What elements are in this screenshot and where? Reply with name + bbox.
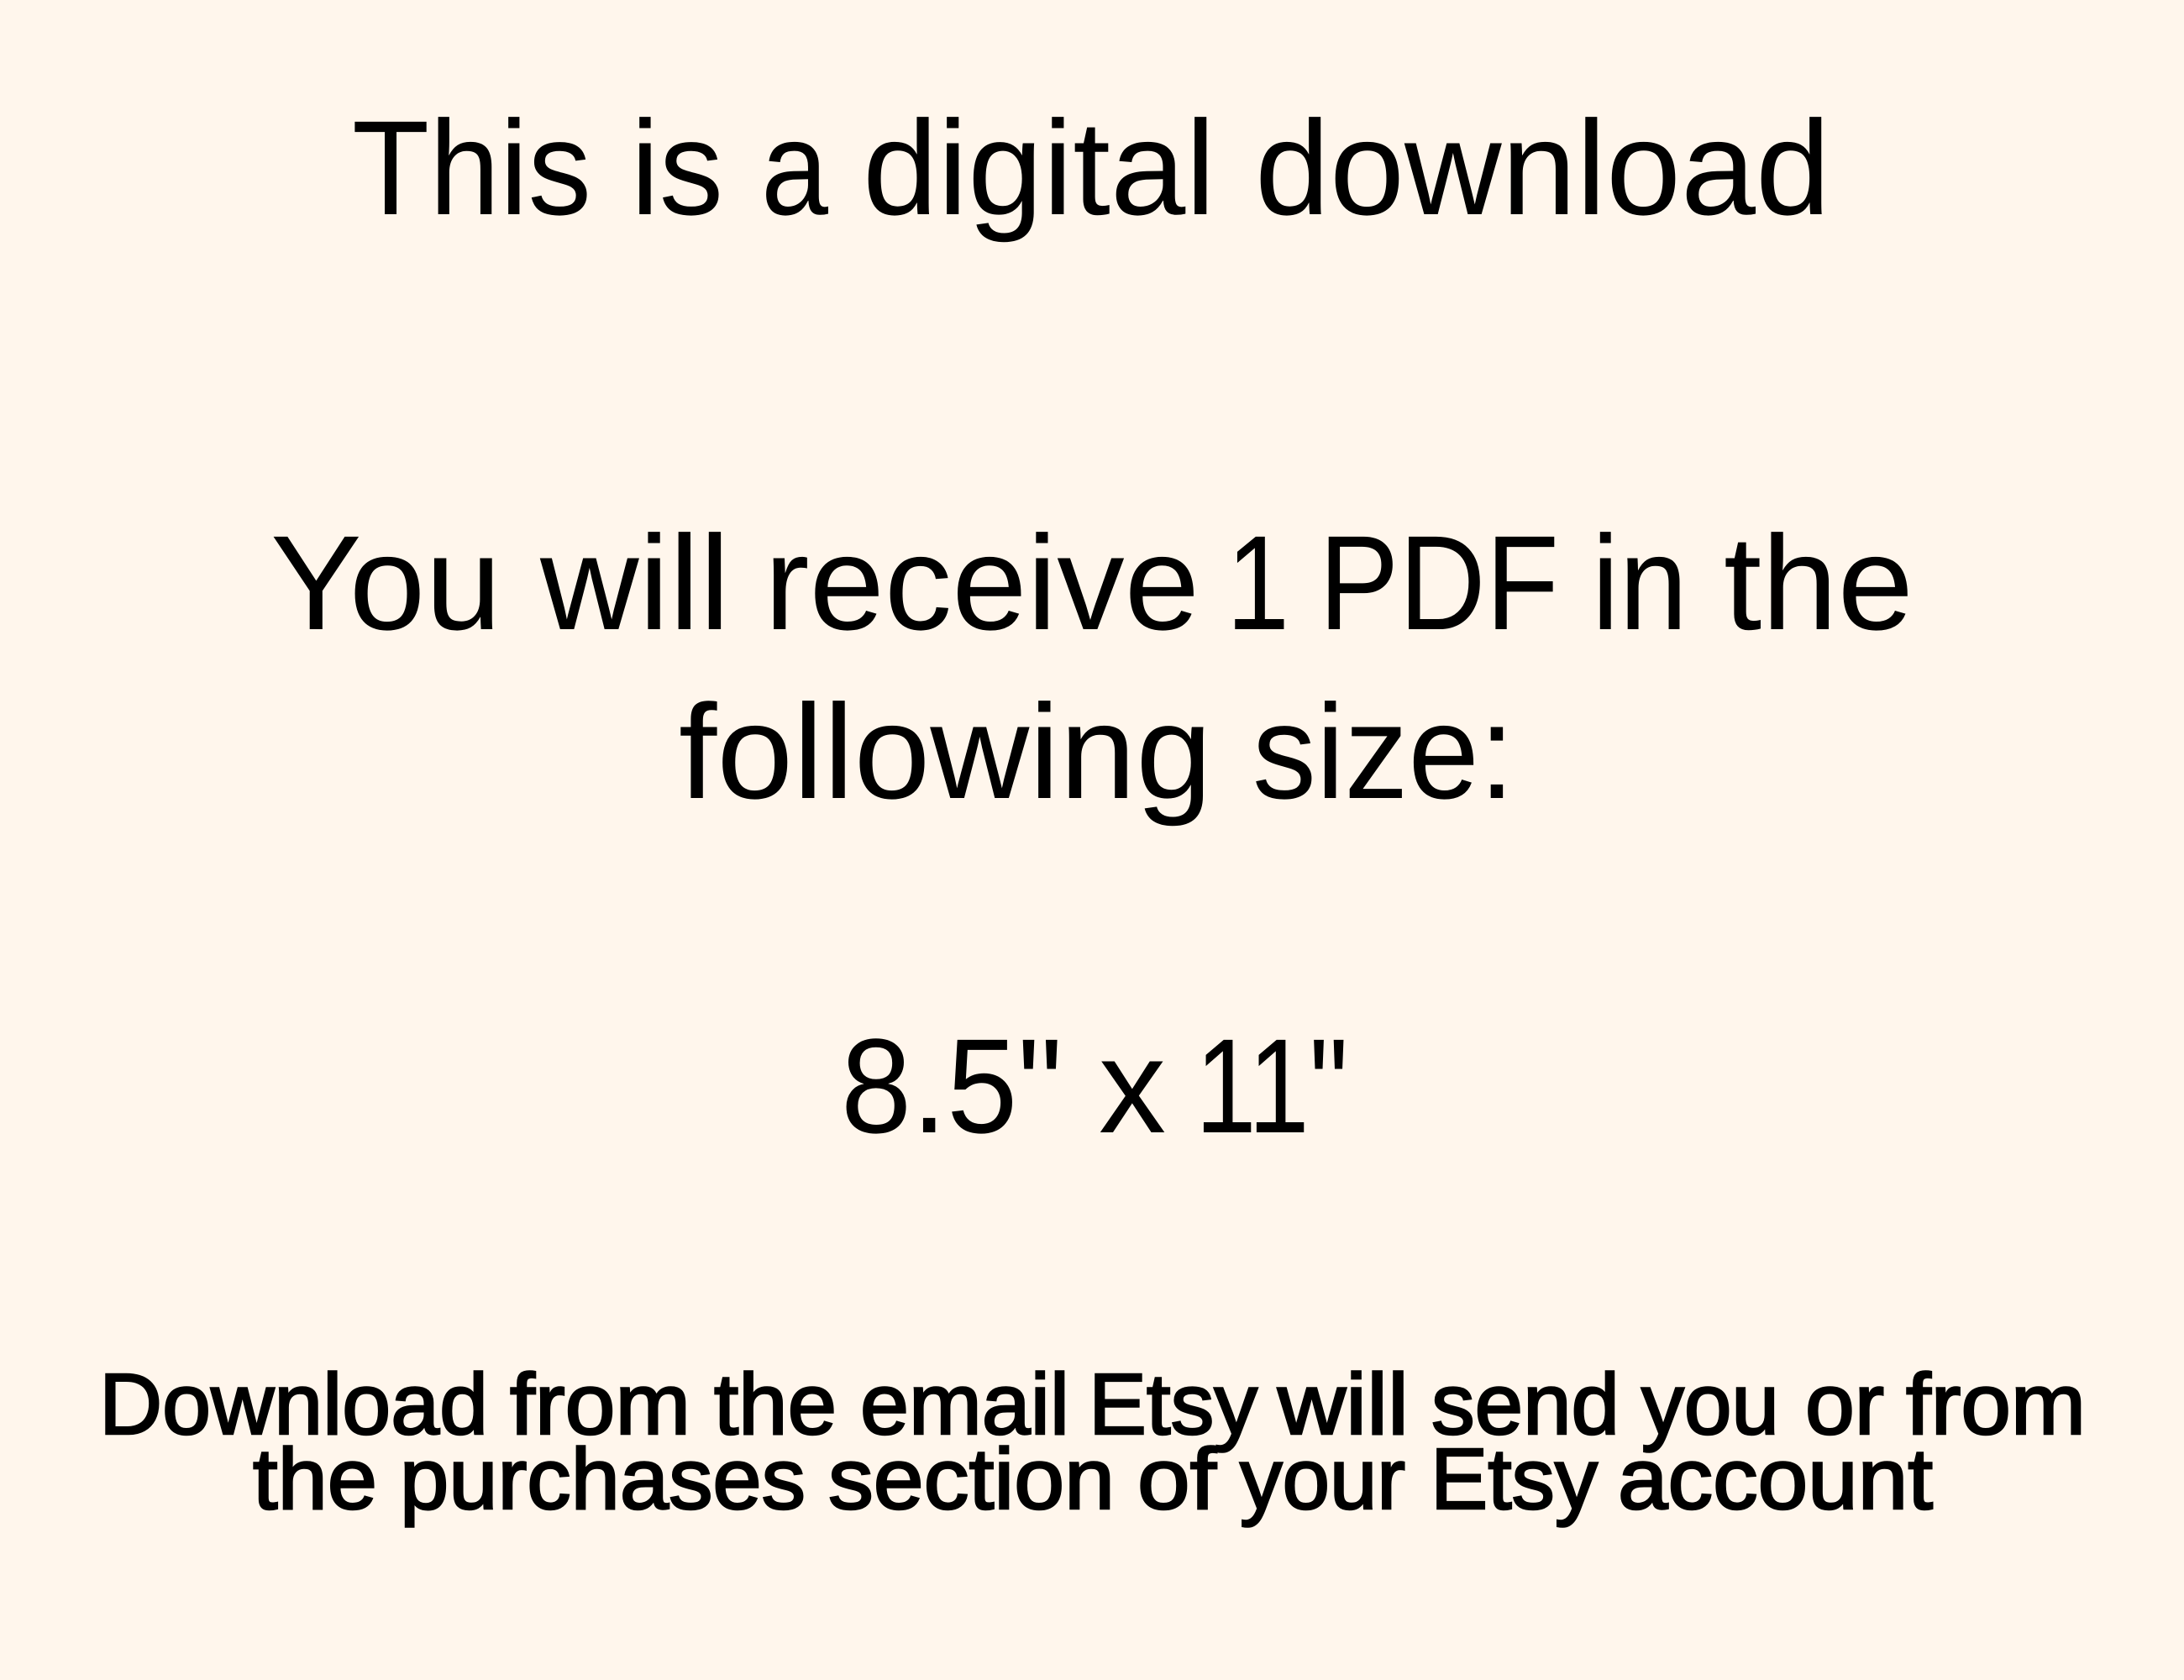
text block: you will receive, line 1: will: [539, 507, 730, 658]
instructions, line 2: your: [1240, 1431, 1405, 1527]
instructions, line 1: email: [860, 1356, 1069, 1452]
instructions, line 1: or: [1805, 1356, 1884, 1452]
text block: you will receive, line 1: the: [1724, 507, 1914, 658]
instructions, line 2: purchases: [400, 1431, 806, 1527]
instructions, line 1: send: [1431, 1356, 1620, 1452]
instructions, line 1: the: [714, 1356, 837, 1452]
instructions, line 2: the: [253, 1431, 377, 1527]
text block: page size: 11": [1195, 1011, 1348, 1161]
heading: digital download: This: [352, 92, 591, 243]
instructions, line 1: [99, 1356, 2086, 1452]
instructions, line 1: Download: [99, 1356, 488, 1452]
instructions, line 1: will: [1277, 1356, 1409, 1452]
heading: digital download: digital: [863, 92, 1215, 243]
heading: digital download: [352, 92, 1830, 243]
text block: page size: x: [1099, 1011, 1166, 1161]
instructions, line 2: section: [828, 1431, 1115, 1527]
text block: you will receive, line 1: PDF: [1319, 507, 1559, 658]
heading: digital download: download: [1255, 92, 1830, 243]
text block: you will receive, line 2: size:: [1252, 676, 1515, 827]
text block: page size: 8.5": [841, 1011, 1063, 1161]
text block: page size: [841, 1011, 1348, 1161]
instructions, line 2: Etsy: [1431, 1431, 1598, 1527]
heading: digital download: is: [631, 92, 723, 243]
text block: you will receive, line 1: 1: [1226, 507, 1289, 658]
instructions, line 1: you: [1641, 1356, 1779, 1452]
instructions, line 1: Etsy: [1089, 1356, 1257, 1452]
text block: you will receive, line 2: [679, 676, 1515, 827]
instructions, line 2: of: [1137, 1431, 1216, 1527]
text block: you will receive, line 1: [270, 507, 1914, 658]
text block: you will receive, line 1: in: [1592, 507, 1688, 658]
text block: you will receive, line 1: You: [270, 507, 501, 658]
instructions, line 1: from: [1906, 1356, 2086, 1452]
instructions, line 2: account: [1618, 1431, 1933, 1527]
instructions, line 2: [253, 1431, 1933, 1527]
instructions, line 1: from: [510, 1356, 690, 1452]
text block: you will receive, line 2: following: [679, 676, 1212, 827]
text block: you will receive, line 1: receive: [764, 507, 1200, 658]
heading: digital download: a: [761, 92, 828, 243]
